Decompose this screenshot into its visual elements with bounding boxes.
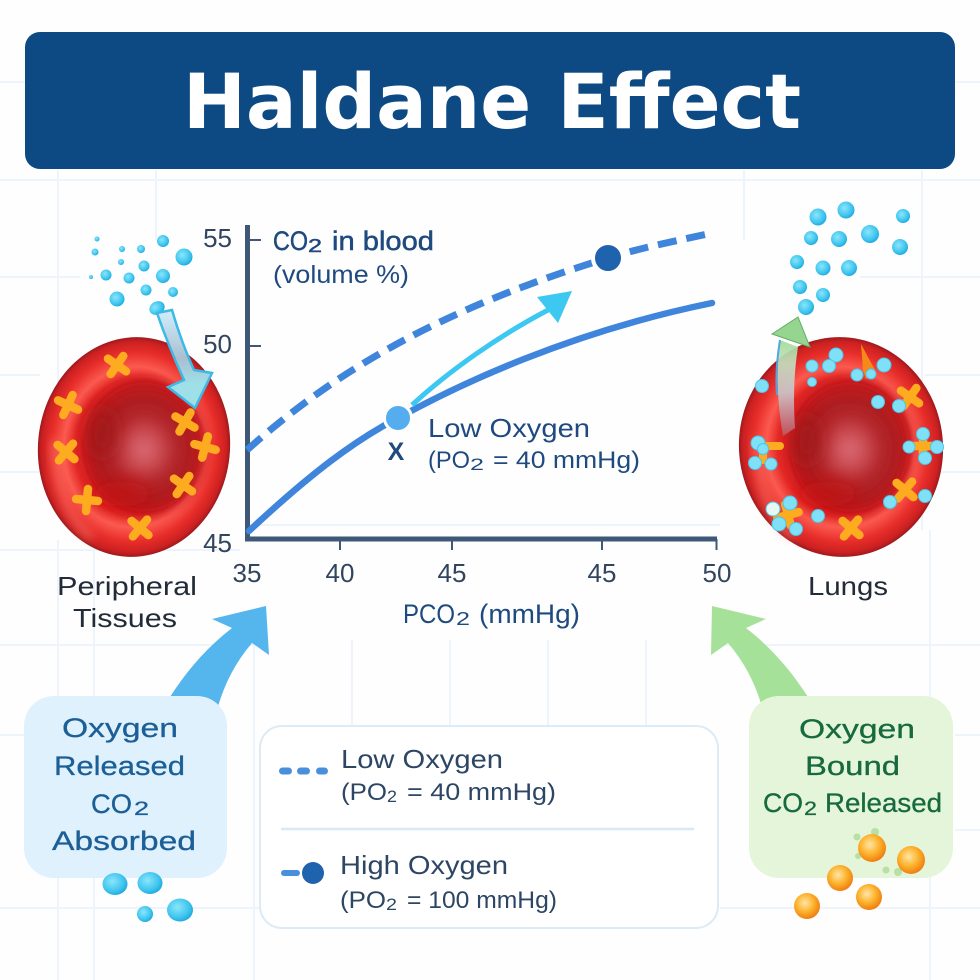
curve: dashed xyxy=(247,233,712,450)
legend: high oxygen: High Oxygen xyxy=(340,850,508,880)
callout: oxygen released: Released xyxy=(54,751,185,781)
arrow out of cell xyxy=(772,317,810,436)
green specks xyxy=(854,828,902,876)
y axis title xyxy=(273,226,434,289)
label low oxygen xyxy=(428,413,640,474)
callout: oxygen released: Oxygen xyxy=(62,713,178,743)
arrow into cell xyxy=(157,310,212,408)
label: lungs: Lungs xyxy=(808,571,888,601)
legend: low oxygen: 2 xyxy=(387,787,397,806)
callout: oxygen bound: Bound xyxy=(805,751,900,781)
bubbles leaving xyxy=(790,202,910,315)
callout: oxygen released: CO xyxy=(91,789,132,819)
bound bubbles on cell xyxy=(748,348,944,536)
red blood cell xyxy=(728,327,954,567)
panel: lungs xyxy=(728,202,954,601)
label low oxygen: 2 xyxy=(470,455,484,474)
chart: CO2 in blood vs PCO2 xyxy=(203,223,731,629)
callout: oxygen bound: Oxygen xyxy=(799,714,915,744)
label X: X xyxy=(388,438,405,466)
callout: oxygen released xyxy=(24,696,227,922)
legend: low oxygen: Low Oxygen xyxy=(341,744,503,774)
callout: oxygen bound: Released xyxy=(825,788,942,818)
arrow along shift xyxy=(412,291,572,405)
bubbles xyxy=(102,872,193,922)
y axis title: CO xyxy=(273,226,308,256)
orange markers xyxy=(762,344,934,543)
bubbles entering xyxy=(89,235,192,318)
x axis title xyxy=(403,599,580,629)
point high xyxy=(593,243,623,273)
red blood cell xyxy=(27,328,241,566)
legend: low oxygen xyxy=(282,744,556,806)
label low oxygen: (PO xyxy=(428,447,470,474)
callout: oxygen bound xyxy=(749,696,953,919)
label low oxygen: = 40 mmHg) xyxy=(493,447,640,474)
axes xyxy=(248,225,717,539)
y axis title: in blood xyxy=(332,226,434,256)
y axis numbers: 55 xyxy=(203,223,232,253)
legend xyxy=(260,726,718,928)
label: peripheral tissues: Peripheral xyxy=(57,571,197,601)
legend: high oxygen: = 100 mmHg) xyxy=(407,887,557,914)
callout: oxygen bound: 2 xyxy=(804,799,817,820)
x axis numbers: 45 xyxy=(588,558,616,588)
x axis title: (mmHg) xyxy=(479,599,580,629)
legend: high oxygen: 2 xyxy=(386,895,397,914)
label: peripheral tissues xyxy=(57,571,197,633)
y axis numbers: 50 xyxy=(203,329,232,359)
legend: high oxygen: (PO xyxy=(340,887,386,914)
label: peripheral tissues: Tissues xyxy=(73,603,177,633)
x axis numbers: 40 xyxy=(326,558,354,588)
y axis numbers xyxy=(203,223,232,558)
orange markers xyxy=(51,350,218,543)
curve: solid xyxy=(249,303,712,531)
panel: peripheral tissues xyxy=(27,235,241,633)
y axis title: (volume %) xyxy=(273,261,409,289)
x axis title: PCO xyxy=(403,599,455,629)
callout: oxygen released: Absorbed xyxy=(52,826,196,856)
arrow: blue to chart xyxy=(170,606,269,710)
x axis numbers: 35 xyxy=(233,558,261,588)
x axis title: 2 xyxy=(456,609,470,629)
label low oxygen: Low Oxygen xyxy=(428,413,590,443)
title banner xyxy=(25,32,955,169)
legend: high oxygen xyxy=(284,850,557,914)
callout: oxygen released: 2 xyxy=(134,799,149,820)
title: Haldane Effect xyxy=(183,57,801,146)
x axis numbers: 45 xyxy=(438,558,466,588)
point X xyxy=(384,404,412,432)
x axis numbers xyxy=(233,558,731,588)
orange bubbles xyxy=(794,834,925,919)
callout: oxygen bound: CO xyxy=(763,788,803,818)
arrow: green to chart xyxy=(711,606,808,710)
x axis numbers: 50 xyxy=(703,558,731,588)
legend: low oxygen: (PO xyxy=(341,779,387,806)
y axis title: 2 xyxy=(308,236,322,256)
y axis numbers: 45 xyxy=(203,528,232,558)
legend: low oxygen: = 40 mmHg) xyxy=(407,779,556,806)
